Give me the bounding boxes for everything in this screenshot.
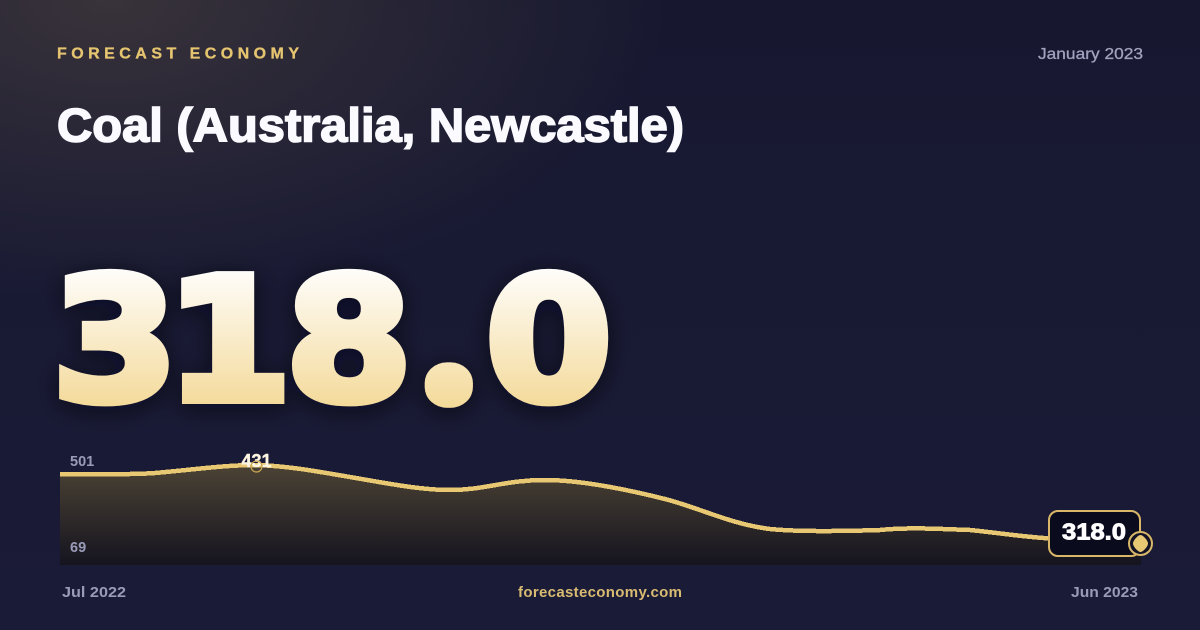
- end date: Jun 2023: [1071, 584, 1138, 601]
- peak marker: [251, 461, 262, 472]
- start date: Jul 2022: [62, 584, 126, 601]
- axis min label: 69: [70, 540, 86, 556]
- axis max label: 501: [70, 454, 94, 470]
- brand label: FORECAST ECONOMY: [57, 46, 299, 62]
- peak label: 431: [241, 451, 272, 471]
- trend line: [60, 465, 1141, 543]
- date label: January 2023: [1038, 46, 1143, 63]
- source url: forecasteconomy.com: [518, 584, 682, 601]
- title: Coal (Australia, Newcastle): [57, 98, 684, 152]
- current value callout: 318.0: [1062, 518, 1126, 544]
- big value: 0: [486, 242, 612, 440]
- big value: .: [445, 369, 453, 392]
- area fill: [60, 465, 1141, 565]
- end marker: [1129, 532, 1152, 555]
- current value callout: [1049, 511, 1140, 556]
- big value: [52, 242, 612, 440]
- sparkline chart: [60, 451, 1152, 565]
- big value: 318: [52, 242, 412, 440]
